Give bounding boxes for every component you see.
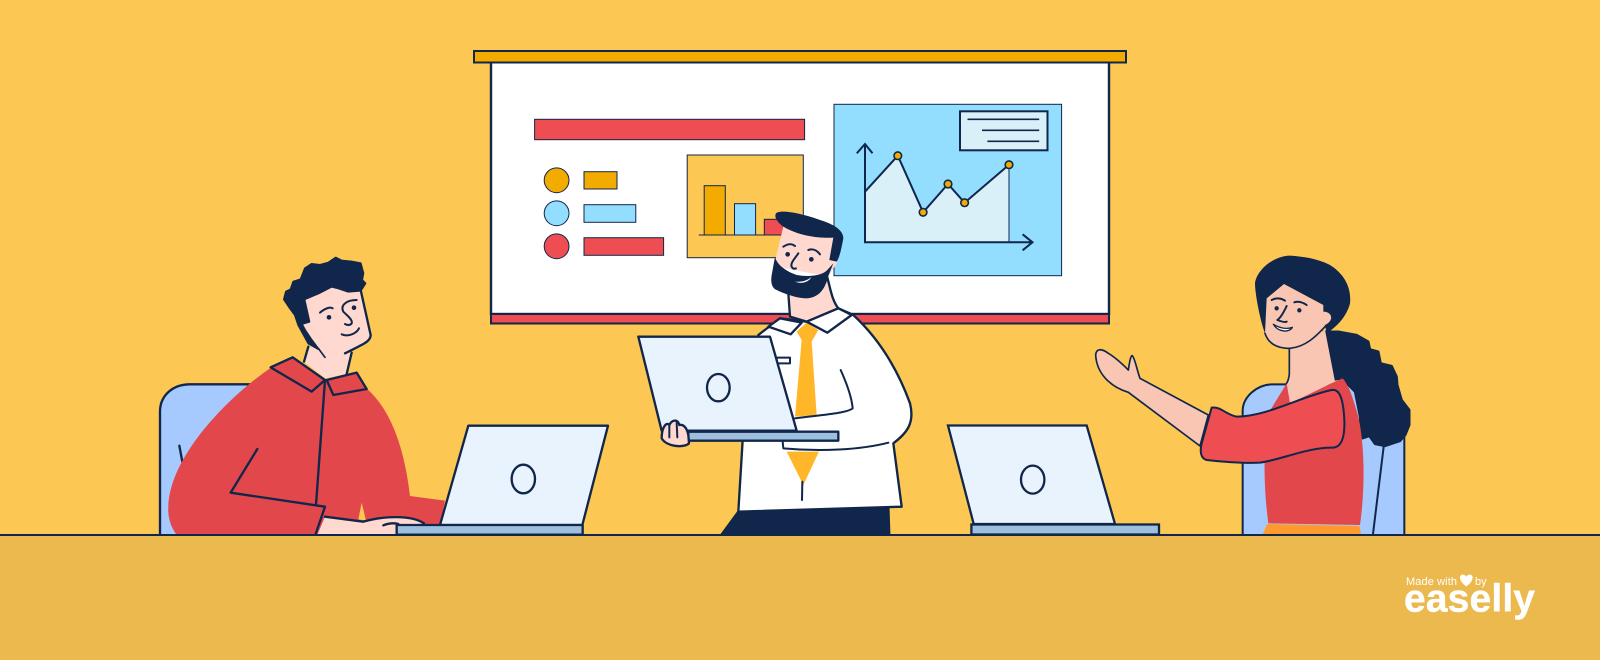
ponytail [1323, 332, 1409, 446]
sleeve [1201, 390, 1344, 463]
chair [1243, 384, 1404, 537]
collar [271, 357, 367, 395]
shirt pocket tag [777, 358, 790, 363]
red sweater [168, 358, 445, 537]
laptop [397, 426, 608, 535]
neck [1287, 330, 1335, 403]
facial features [783, 244, 820, 269]
arm and open hand [1096, 350, 1208, 446]
white shirt [738, 308, 911, 512]
shirt details [783, 370, 888, 500]
face [1265, 284, 1331, 348]
hair [1255, 256, 1350, 333]
trend line with points [865, 152, 1013, 216]
smile [795, 277, 812, 283]
screen top rail [474, 51, 1126, 62]
slide title bar [535, 119, 805, 140]
trousers [720, 506, 889, 537]
area under line [865, 156, 1009, 242]
face [298, 283, 371, 357]
curly hair [284, 258, 365, 349]
laptop held open [638, 337, 838, 441]
logo: made with love by easelly: easelly [1404, 578, 1535, 620]
face [776, 227, 842, 277]
icon: heart [1460, 575, 1473, 586]
person: man on the left with laptop [160, 258, 608, 537]
bar chart [687, 155, 803, 258]
facial features [1272, 298, 1307, 331]
neck [788, 275, 838, 322]
chart note box [960, 111, 1048, 150]
chart axes [857, 144, 1032, 250]
hair [775, 212, 843, 262]
collar [768, 308, 852, 334]
person: standing bearded man with laptop [638, 212, 911, 537]
neck [304, 347, 352, 378]
table [0, 535, 1600, 660]
facial features [320, 300, 359, 335]
hand on keyboard [317, 517, 424, 537]
gap between arm and body [358, 503, 366, 521]
line chart panel [834, 104, 1062, 276]
orange skirt [1262, 524, 1362, 537]
logo: made with love by easelly: by [1475, 576, 1487, 588]
legend: dots and bars [544, 168, 664, 259]
screen white surface [491, 62, 1109, 314]
chair [160, 384, 260, 537]
hand under laptop [662, 421, 689, 446]
logo: made with love by easelly: Made with [1406, 576, 1457, 588]
panel: projection screen [474, 51, 1126, 324]
red dress [1265, 378, 1364, 525]
yellow tie [787, 323, 819, 485]
sleeve and placket lines [231, 380, 325, 536]
screen bottom red strip [491, 314, 1109, 324]
person: woman gesturing on the right [1096, 256, 1409, 537]
beard [771, 257, 833, 298]
laptop on table right [948, 426, 1159, 534]
